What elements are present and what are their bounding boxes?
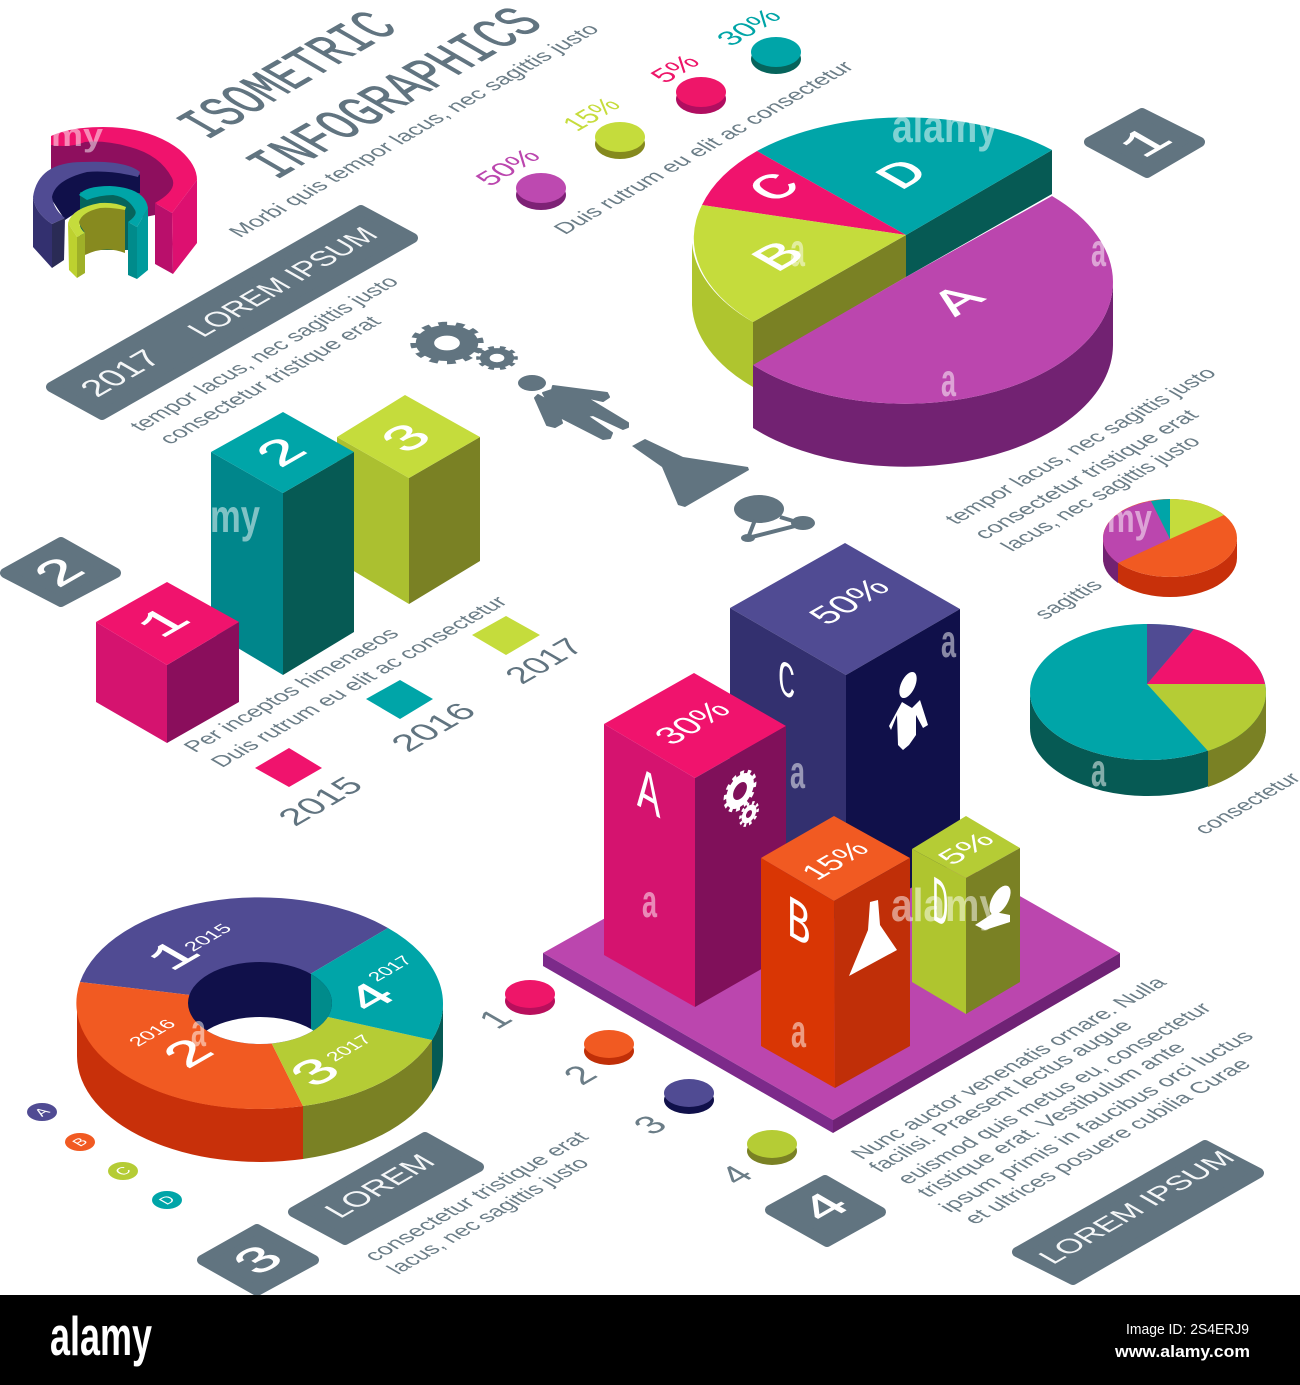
- chart: donut: 1: [135, 933, 216, 980]
- title: [165, 0, 562, 190]
- legend: ABCD dots: D: [155, 1193, 180, 1207]
- chart: 3d bars 1 2 3: [96, 395, 480, 743]
- bar B: a: [791, 1005, 806, 1057]
- text: tempor lacus right: tempor lacus, nec sagittis justo: [939, 364, 1222, 528]
- bar B: [761, 816, 910, 1088]
- banner: 2017 lorem ipsum: [51, 210, 413, 415]
- chart: platform with bars: alamy: [891, 879, 1001, 931]
- bar B: 15%: [794, 837, 877, 885]
- chart: big pie: C: [736, 165, 817, 212]
- icon: flask: [632, 439, 749, 507]
- bar C: 50%: [800, 573, 899, 630]
- legend: ABCD dots: C: [111, 1164, 136, 1178]
- chart: big pie: A: [919, 278, 1001, 325]
- legend: percentage discs: 5%: [643, 50, 707, 87]
- bar C: a: [790, 746, 805, 798]
- chart: donut: 2017: [363, 953, 417, 984]
- chart: big pie: D: [864, 152, 945, 199]
- chart: big pie: a: [790, 224, 805, 276]
- banner: lorem ipsum bottom right: LOREM IPSUM: [1031, 1146, 1242, 1268]
- legend: years: 2017: [496, 633, 592, 689]
- legend: numbered discs: 1: [468, 1003, 521, 1034]
- icon: person: [518, 375, 628, 439]
- legend: percentage discs: 15%: [555, 93, 627, 135]
- text: nunc auctor paragraph: et ultrices posuere cubilia Curae: [958, 1055, 1256, 1228]
- footer: stock photo bar: alamy: [50, 1305, 152, 1367]
- chart: big pie: alamy: [892, 100, 998, 152]
- legend: numbered discs: 3: [623, 1109, 676, 1140]
- chart: 3d bars 1 2 3: 1: [125, 600, 206, 647]
- text: per inceptos: Per inceptos himenaeos: [178, 624, 405, 756]
- bar D: D: [932, 864, 948, 949]
- badge: 2: 2: [21, 550, 102, 597]
- chart: medium pie: a: [1091, 744, 1106, 796]
- bar C: C: [778, 650, 795, 717]
- bar B: B: [787, 885, 810, 967]
- chart: big pie: a: [941, 354, 956, 406]
- legend: ABCD dots: A: [31, 1105, 54, 1119]
- text: nunc auctor paragraph: euismod quis metus eu, consectetur: [891, 999, 1217, 1188]
- text: per inceptos: Duis rutrum eu elit ac consectetur: [205, 592, 513, 771]
- chart: 3d bars 1 2 3: 3: [368, 416, 449, 463]
- legend: percentage discs: 50%: [468, 144, 547, 190]
- text: tempor lacus right: consectetur tristique erat: [968, 406, 1204, 543]
- legend: percentage discs: 30%: [709, 4, 788, 50]
- text: nunc auctor paragraph: facilisi. Praesent lectus augue: [863, 1016, 1138, 1176]
- chart: donut: a: [191, 1004, 206, 1056]
- icon: concentric half-ring logo: my: [51, 117, 103, 153]
- bar C: a: [941, 615, 956, 667]
- chart: donut: 4: [332, 975, 413, 1022]
- legend: percentage discs: [468, 4, 801, 210]
- badge: 3: 3: [220, 1238, 301, 1285]
- legend: numbered discs: [468, 980, 797, 1190]
- chart: donut: 2017: [321, 1032, 377, 1064]
- badge: 1: [1089, 113, 1200, 173]
- badge: 4: [770, 1180, 881, 1242]
- chart: small pie: my: [1107, 497, 1153, 541]
- legend: years: 2016: [382, 697, 484, 757]
- legend: numbered discs: 2: [553, 1059, 606, 1090]
- banner: lorem: LOREM: [317, 1150, 443, 1223]
- text: nunc auctor paragraph: [845, 973, 1259, 1228]
- text: morbi: Morbi quis tempor lacus, nec sagittis justo: [223, 20, 605, 241]
- banner: 2017 lorem ipsum: 2017: [71, 344, 170, 402]
- chart: donut: 2: [150, 1031, 231, 1078]
- text: consectetur bottom: lacus, nec sagittis justo: [381, 1154, 595, 1278]
- icon: brain: [734, 495, 815, 542]
- badge: 1: 1: [1107, 120, 1188, 167]
- text: duis rutrum top: Duis rutrum eu elit ac consectetur: [548, 57, 859, 238]
- bar C: [730, 543, 960, 925]
- chart: 3d bars 1 2 3: my: [210, 490, 260, 542]
- chart: 3d bars 1 2 3: 2: [243, 430, 324, 477]
- chart: donut: 2016: [124, 1016, 180, 1049]
- bar A: [604, 673, 786, 1007]
- chart: big pie: a: [1091, 224, 1106, 276]
- legend: numbered discs: 4: [709, 1159, 762, 1190]
- legend: years: [255, 616, 592, 831]
- chart: donut: [76, 897, 443, 1162]
- legend: ABCD dots: [27, 1103, 182, 1209]
- chart: small pie: [1103, 497, 1237, 597]
- text: consectetur bottom: consectetur tristique erat: [358, 1128, 594, 1265]
- badge: 4: 4: [786, 1185, 867, 1232]
- text: tempor lacus left: consectetur tristique erat: [153, 312, 387, 448]
- label: sagittis: sagittis: [1028, 576, 1108, 623]
- legend: ABCD dots: B: [69, 1135, 92, 1149]
- text: nunc auctor paragraph: tristique erat. Vestibulum ante: [911, 1038, 1191, 1201]
- banner: 2017 lorem ipsum: LOREM IPSUM: [180, 223, 386, 342]
- bar A: a: [642, 875, 657, 927]
- bar D: [912, 816, 1020, 1014]
- icon: gears: [400, 316, 523, 373]
- badge: 3: [202, 1229, 314, 1291]
- legend: years: 2015: [269, 771, 371, 831]
- chart: big pie: B: [740, 234, 821, 281]
- chart: medium pie: [1030, 624, 1266, 796]
- footer: stock photo bar: Image ID: 2S4ERJ9: [1126, 1321, 1249, 1338]
- chart: donut: 2015: [179, 921, 236, 954]
- bar A: A: [637, 756, 660, 838]
- chart: donut: 3: [277, 1050, 358, 1097]
- icon: concentric half-ring logo: [33, 117, 197, 279]
- chart: platform with bars: [543, 543, 1120, 1133]
- badge: 2: [5, 542, 116, 602]
- footer: stock photo bar: [0, 1295, 1300, 1385]
- text: tempor lacus left: tempor lacus, nec sagittis justo: [124, 272, 404, 435]
- text: tempor lacus right: lacus, nec sagittis justo: [995, 432, 1206, 555]
- bar D: 5%: [930, 828, 1001, 869]
- banner: lorem ipsum bottom right: [1017, 1145, 1259, 1280]
- text: nunc auctor paragraph: ipsum primis in faucibus orci luctus: [933, 1027, 1259, 1216]
- chart: big pie: [692, 100, 1113, 467]
- bar A: 30%: [646, 696, 740, 750]
- text: nunc auctor paragraph: Nunc auctor venenatis ornare. Nulla: [845, 973, 1173, 1163]
- footer: stock photo bar: www.alamy.com: [1114, 1342, 1250, 1361]
- banner: lorem: [293, 1137, 479, 1240]
